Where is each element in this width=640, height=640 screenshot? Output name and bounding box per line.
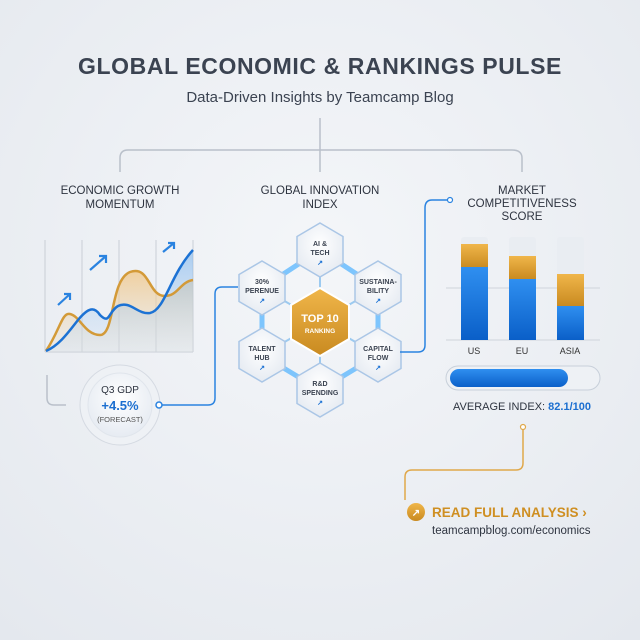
hex network: CAPITAL [363,346,394,353]
hex network: ↗ [317,400,323,407]
hex network: ↗ [375,365,381,372]
center hex: RANKING [305,328,335,335]
heading: market [467,185,577,223]
GDP circle: (FORECAST) [97,415,143,424]
bar chart: US [468,346,480,356]
bar chart [446,237,600,356]
heading: market: COMPETITIVENESS [467,198,577,210]
hex network: FLOW [368,355,389,362]
bar chart: EU [516,346,528,356]
line chart [45,240,193,352]
average index: AVERAGE INDEX: 82.1/100 [453,401,591,413]
subtitle: Data-Driven Insights by Teamcamp Blog [186,89,454,106]
hex network: 30% [255,279,270,286]
hex network: SUSTAINA- [359,279,397,286]
hex network: AI & [313,241,327,248]
hex network: ↗ [317,260,323,267]
heading: innovation: INDEX [302,199,338,211]
hex network: ↗ [259,298,265,305]
gray arrow [47,375,66,405]
CTA: teamcampblog.com/economics [432,525,591,537]
hex network: HUB [254,355,270,362]
hex network: R&D [312,381,328,388]
bar chart: ASIA [560,346,580,356]
progress bar [446,366,600,390]
CTA: READ FULL ANALYSIS › [432,505,587,520]
heading: innovation: GLOBAL INNOVATION [261,185,379,197]
heading: economic growth: ECONOMIC GROWTH [61,185,179,197]
CTA [407,503,591,537]
title: GLOBAL ECONOMIC & RANKINGS PULSE [78,53,562,79]
hex network: ↗ [259,365,265,372]
orange connector [405,428,523,500]
hex network [239,223,401,417]
GDP circle [80,365,162,445]
heading: economic growth: MOMENTUM [86,199,154,211]
blue connector right [400,200,448,352]
hex network: ↗ [375,298,381,305]
hex network: SPENDING [302,390,339,397]
center hex [291,288,349,356]
hex network: PERENUE [245,288,279,295]
CTA: ↗ [412,508,420,519]
heading: market: MARKET [498,185,546,197]
heading: economic growth [61,185,179,211]
heading: innovation [261,185,379,211]
blue connector left [158,287,238,405]
center hex: TOP 10 [301,313,339,325]
tree connector [120,118,522,172]
GDP circle: Q3 GDP [101,385,139,396]
hex network: TECH [310,250,330,257]
GDP circle: +4.5% [101,398,139,413]
heading: market: SCORE [502,211,543,223]
hex network: BILITY [367,288,389,295]
hex network: TALENT [248,346,276,353]
